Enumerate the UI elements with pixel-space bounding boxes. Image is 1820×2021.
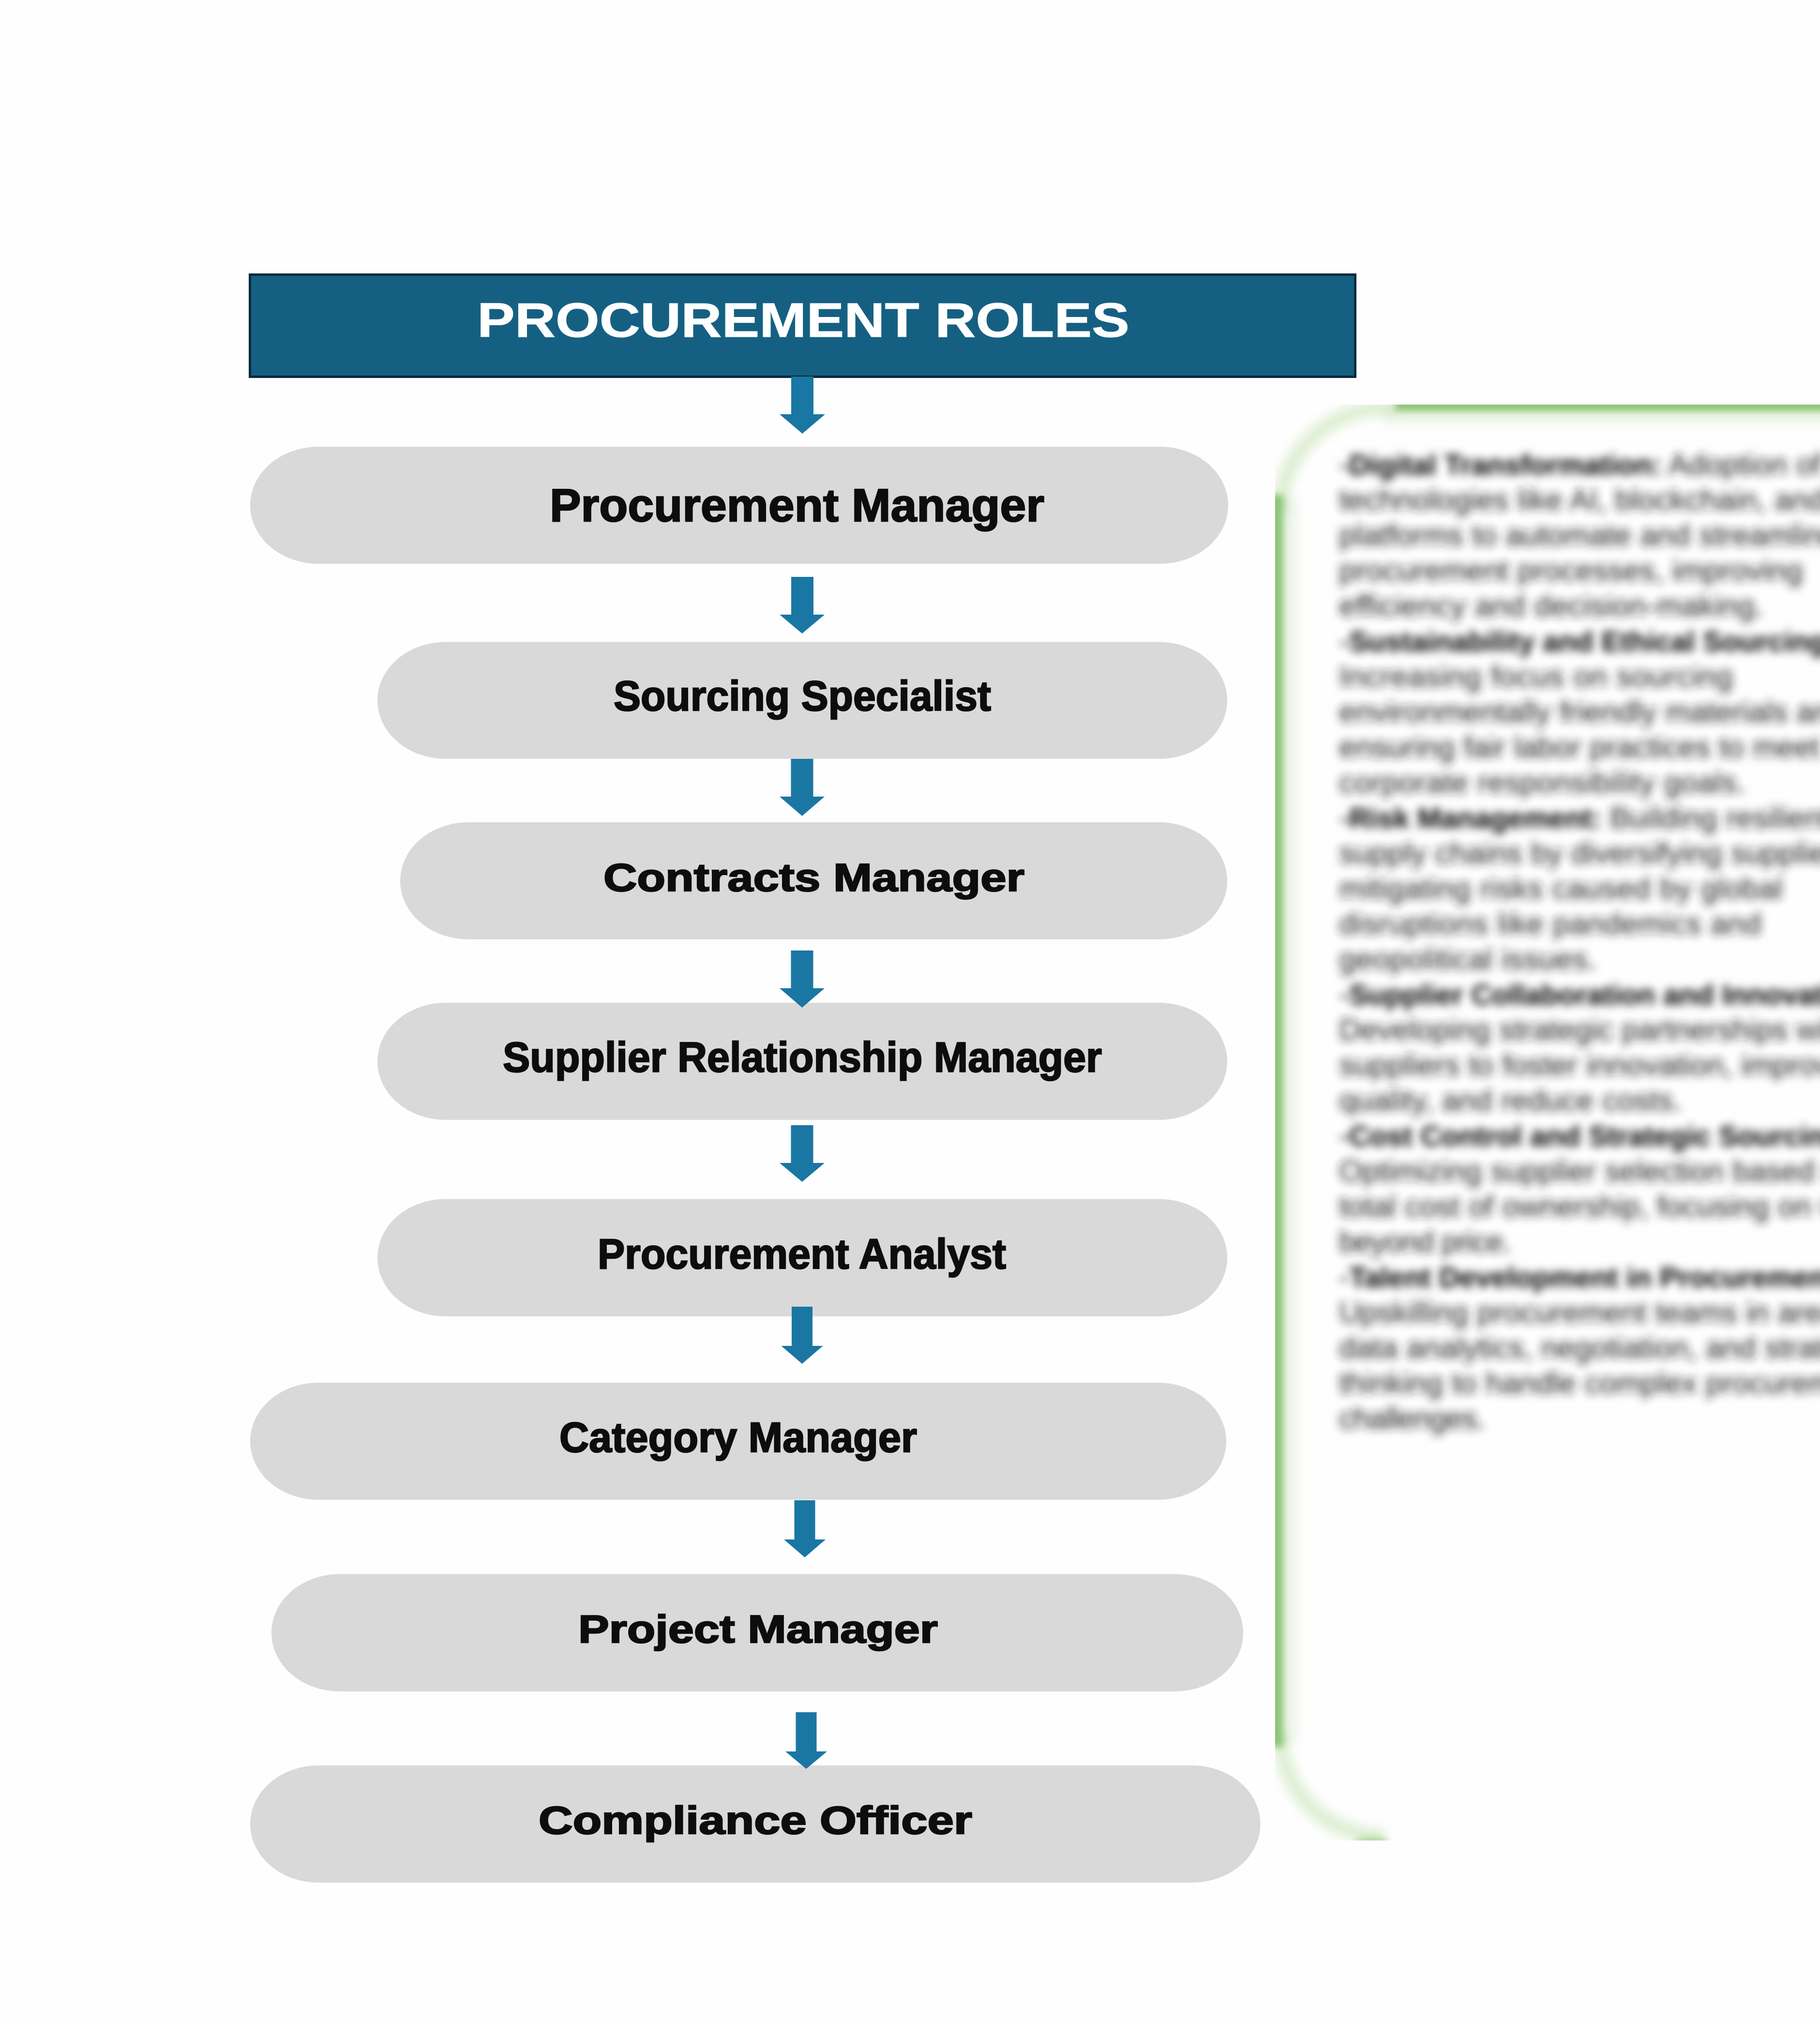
role: Contracts Manager: [400, 822, 1227, 939]
arrow: Contracts Manager to Supplier Relationship Manager: [780, 950, 825, 1008]
arrow: Procurement Analyst to Category Manager: [781, 1307, 823, 1364]
arrow: Supplier Relationship Manager to Procurement Analyst: [780, 1125, 825, 1182]
panel text: blurred procurement trends: beyond price.: [1339, 1225, 1511, 1259]
panel text: blurred procurement trends: procurement processes, improving: [1339, 554, 1803, 588]
infographic canvas: [249, 273, 1820, 1883]
panel text: blurred procurement trends: mitigating risks caused by global: [1339, 872, 1783, 905]
panel text: blurred procurement trends: [1339, 448, 1820, 1435]
role: Procurement Analyst: Procurement Analyst: [598, 1231, 1006, 1278]
role: Supplier Relationship Manager: [377, 1003, 1227, 1120]
panel text: blurred procurement trends: quality, and reduce costs.: [1339, 1084, 1682, 1117]
panel text: blurred procurement trends: Increasing focus on sourcing: [1339, 660, 1733, 694]
arrow: title to Procurement Manager: [780, 377, 825, 434]
arrow: Sourcing Specialist to Contracts Manager: [780, 759, 825, 816]
arrow: Procurement Manager to Sourcing Specialist: [780, 577, 825, 633]
arrow: Project Manager to Compliance Officer: [785, 1712, 827, 1769]
role: Procurement Manager: Procurement Manager: [550, 480, 1044, 531]
panel text: blurred procurement trends: disruptions like pandemics and: [1339, 907, 1761, 941]
title banner: [250, 275, 1355, 377]
arrow: Category Manager to Project Manager: [784, 1500, 826, 1557]
panel text: blurred procurement trends: efficiency and decision-making.: [1339, 589, 1763, 623]
title banner: PROCUREMENT ROLES: [477, 293, 1129, 347]
panel text: blurred procurement trends: -Digital Transformation: Adoption of: [1339, 448, 1820, 482]
panel text: blurred procurement trends: corporate responsibility goals.: [1339, 766, 1745, 799]
panel text: blurred procurement trends: -Risk Management: Building resilient: [1339, 801, 1820, 835]
panel text: blurred procurement trends: technologies like AI, blockchain, and: [1339, 483, 1820, 517]
panel text: blurred procurement trends: challenges.: [1339, 1402, 1485, 1435]
role: Compliance Officer: [250, 1765, 1260, 1883]
role: Category Manager: [250, 1383, 1226, 1500]
role: Category Manager: Category Manager: [559, 1414, 917, 1461]
role: Project Manager: Project Manager: [578, 1608, 938, 1651]
panel text: blurred procurement trends: geopolitical issues.: [1339, 942, 1596, 976]
role: Sourcing Specialist: Sourcing Specialist: [614, 673, 991, 720]
panel text: blurred procurement trends: ensuring fair labor practices to meet: [1339, 730, 1820, 764]
role: Project Manager: [271, 1574, 1243, 1691]
role: Supplier Relationship Manager: Supplier Relationship Manager: [503, 1034, 1102, 1081]
role: Procurement Manager: [250, 447, 1228, 564]
panel: blurred green frame: [1258, 387, 1820, 1846]
role: Sourcing Specialist: [377, 642, 1227, 759]
role: Contracts Manager: Contracts Manager: [603, 856, 1024, 900]
role: Compliance Officer: Compliance Officer: [539, 1799, 972, 1842]
role: Procurement Analyst: [377, 1199, 1227, 1316]
